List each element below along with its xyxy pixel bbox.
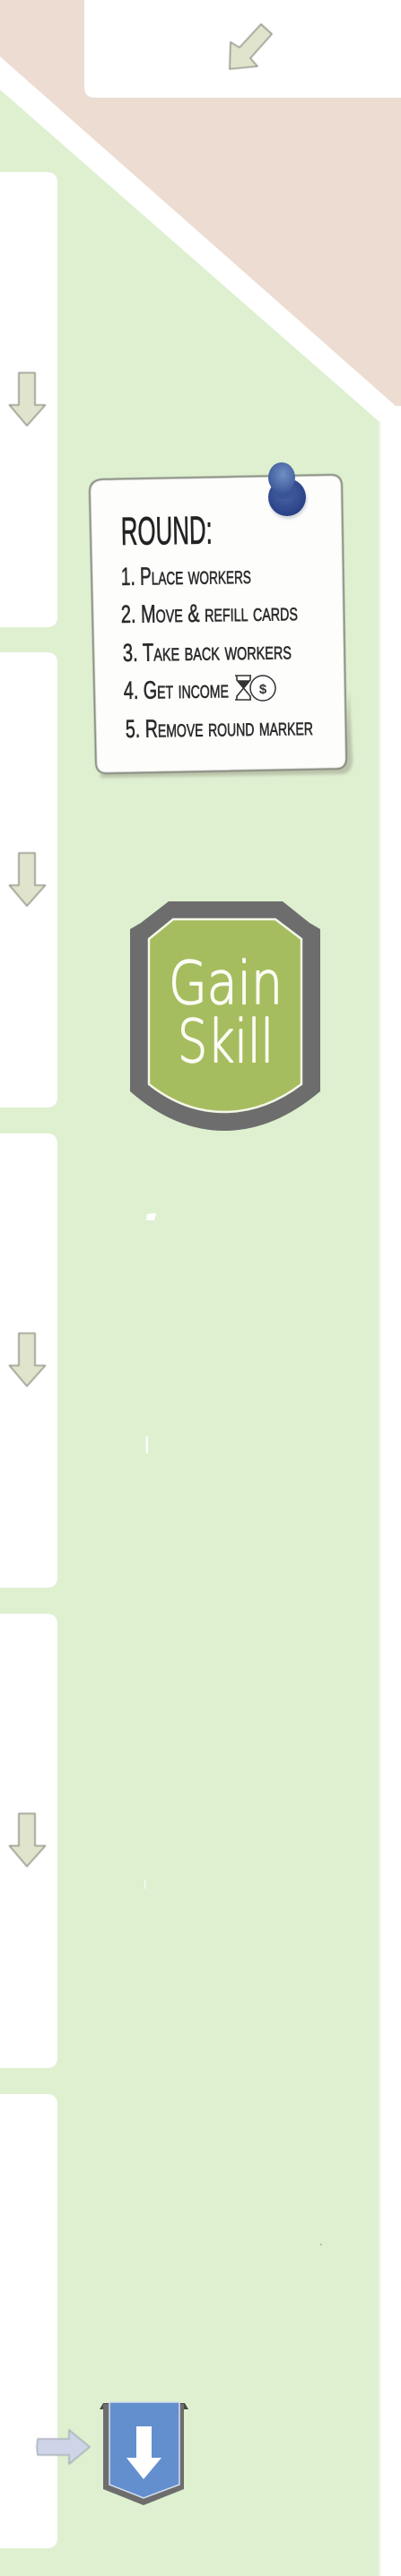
panel: beige section background	[0, 0, 401, 406]
step 5: 5. Remove round marker	[126, 712, 313, 743]
note heading: ROUND:	[120, 509, 213, 554]
panel: white card 2	[0, 652, 57, 1107]
step 3: 3. Take back workers	[123, 636, 292, 667]
arrow: diagonal down-left	[230, 24, 272, 69]
panel: white card 4	[0, 1614, 57, 2068]
badge text: Skill: Skill	[178, 1007, 274, 1076]
step 2: 2. Move & refill cards	[121, 598, 298, 628]
arrow: right to banner	[37, 2430, 90, 2464]
note paper	[90, 475, 346, 773]
badge inner shield	[149, 919, 301, 1112]
banner outer	[103, 2404, 184, 2505]
badge: Gain Skill	[130, 901, 320, 1131]
banner: blue down arrow	[100, 2402, 188, 2505]
speck: white fragment	[146, 1213, 156, 1220]
speck: faint sliver	[144, 1880, 145, 1889]
step 4: 4. Get income	[124, 675, 229, 704]
step 1: 1. Place workers	[121, 561, 251, 590]
banner fill	[109, 2402, 179, 2498]
icon: push pin	[268, 462, 307, 519]
banner tabs	[100, 2403, 188, 2409]
panel: top white card	[84, 0, 401, 98]
arrow: down 1	[9, 373, 45, 426]
arrow: down 4	[9, 1814, 45, 1866]
panel: white card 3	[0, 1133, 57, 1588]
note: round steps	[90, 462, 353, 778]
note shadow	[100, 690, 353, 778]
icon: hourglass	[235, 676, 251, 700]
panel: white card 5	[0, 2094, 57, 2548]
icon: coin: $	[259, 682, 267, 697]
panel: white card 1	[0, 172, 57, 627]
icon: coin	[250, 676, 275, 701]
divider stripe: right edge	[379, 421, 380, 2576]
arrow: down 3	[9, 1333, 45, 1386]
speck: white sliver	[145, 1436, 148, 1453]
banner arrow	[126, 2426, 161, 2479]
badge text: Gain: Gain	[169, 949, 283, 1018]
arrow: down 2	[9, 853, 45, 906]
speck: small mark	[320, 2244, 321, 2245]
badge outer shield	[130, 901, 320, 1131]
